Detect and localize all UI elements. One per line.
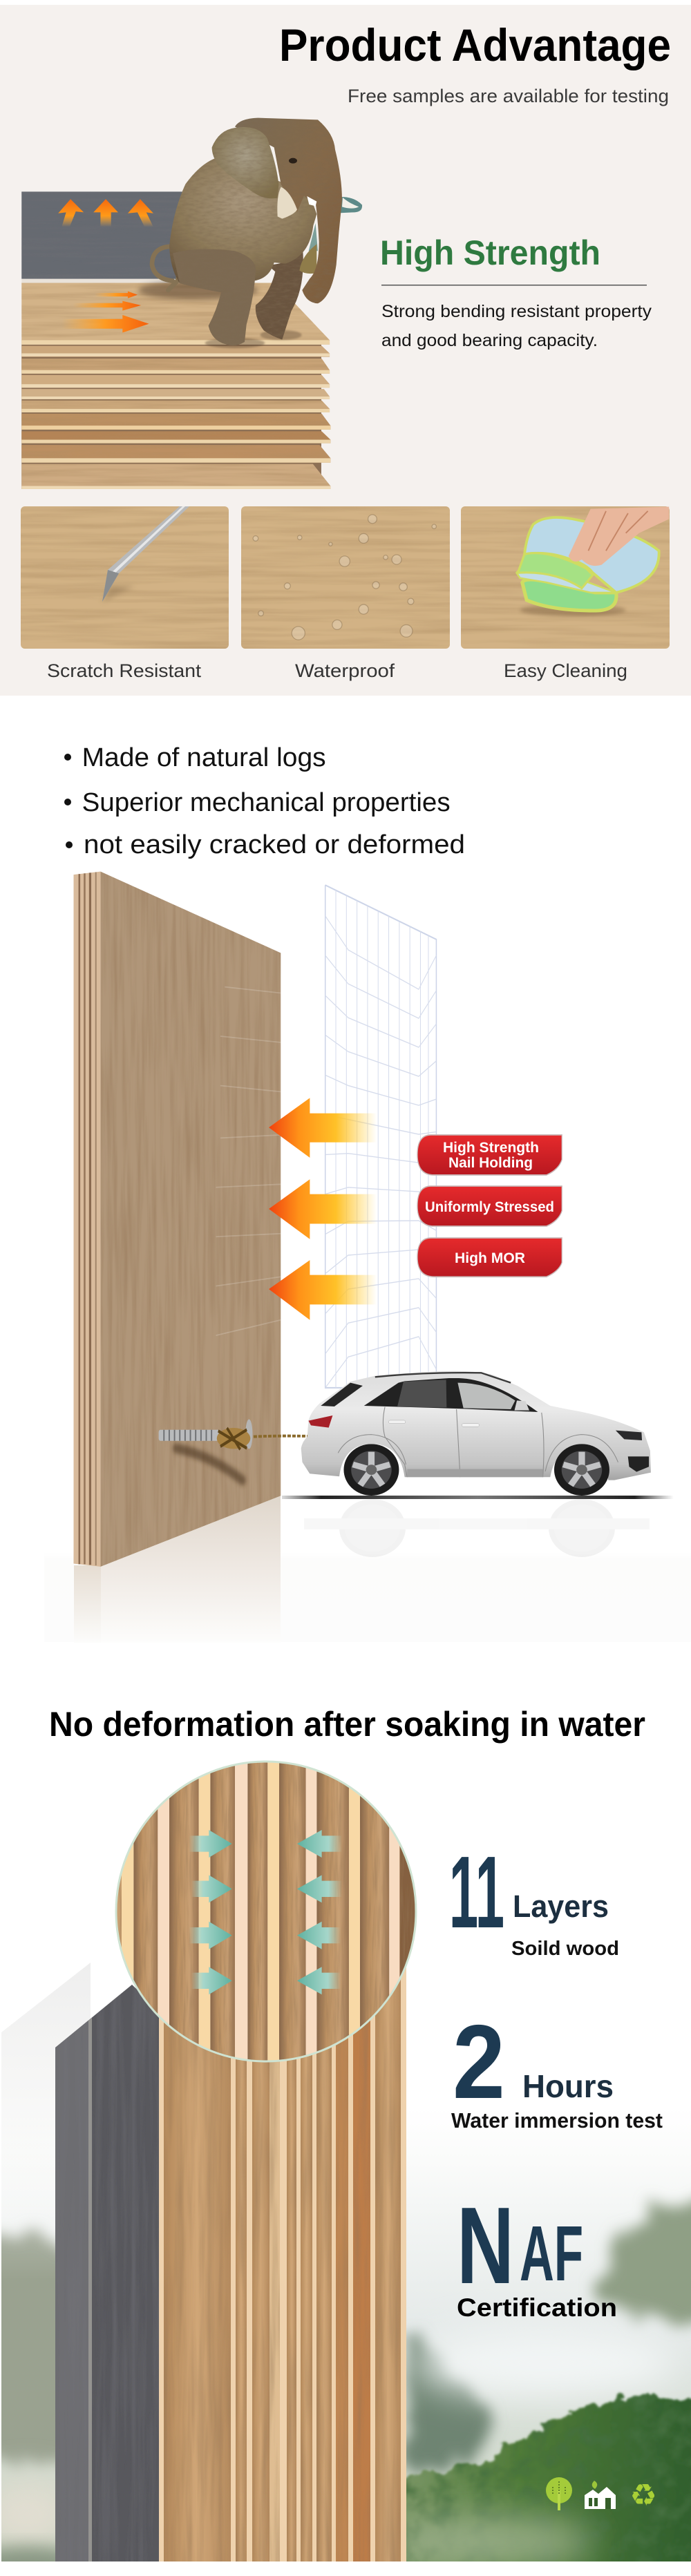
title: Product Advantage (279, 19, 671, 70)
bullet list (64, 743, 465, 859)
windows (321, 1378, 538, 1412)
description text: and good bearing capacity. (381, 331, 598, 350)
fluted wood panel (159, 1955, 406, 2561)
label: high mor (417, 1238, 562, 1277)
misty forest background (1, 2183, 691, 2561)
grey top board (21, 191, 193, 279)
front leg (256, 251, 303, 340)
stat: 2 hours: Hours (522, 2068, 614, 2104)
rear wheel (343, 1444, 399, 1496)
label: uniformly stressed (417, 1186, 562, 1226)
stat: 2 hours: 2 (453, 2003, 505, 2121)
stacked wood layers (21, 283, 330, 489)
door lines and handles (338, 1407, 618, 1477)
icon: towel and hand (517, 506, 669, 616)
screw shadow (176, 1448, 243, 1480)
label: high strength nail holding: High Strength (443, 1140, 539, 1156)
stat: 11 layers: Layers (513, 1889, 609, 1924)
board front face (100, 872, 281, 1567)
plywood edge layers (74, 872, 100, 1567)
label: high strength nail holding (417, 1135, 562, 1175)
stat: 2 hours (451, 2003, 663, 2133)
eye (289, 158, 297, 164)
floor fade background (44, 1552, 691, 1642)
stat: 11 layers (449, 1835, 619, 1960)
floor shadow under car (282, 1496, 674, 1499)
tail (152, 247, 180, 290)
water arrows pointing left (297, 1830, 342, 1994)
front foot on knee (299, 244, 316, 274)
front grille (628, 1456, 649, 1472)
faint mesh on board (216, 987, 281, 1335)
magnified wood slats (115, 1755, 417, 2063)
stat: naf certification (457, 2185, 617, 2322)
tusks (277, 187, 297, 219)
arrows: sideways force (61, 292, 149, 333)
panel: product advantage (0, 5, 691, 696)
panel: soaking test (0, 1705, 691, 2576)
icon: silver car (301, 1371, 651, 1496)
label: high strength nail holding: Nail Holding (448, 1155, 533, 1171)
description text (381, 302, 652, 350)
rear leg (173, 249, 256, 345)
car body (301, 1371, 651, 1480)
head and trunk (235, 118, 342, 303)
plank stack with force arrows (21, 191, 330, 489)
caption: Easy Cleaning (504, 660, 627, 681)
sill (407, 1469, 543, 1477)
icon: recycle: ♻ (630, 2478, 657, 2513)
teal tusk backing (339, 197, 362, 213)
description text: Strong bending resistant property (381, 302, 652, 321)
card: scratch resistant (21, 506, 229, 681)
board reflection (74, 1495, 281, 1643)
ear (212, 127, 278, 198)
label: high mor: High MOR (455, 1250, 525, 1266)
heading: high strength: High Strength (380, 233, 600, 272)
card: waterproof (241, 506, 450, 681)
arrows: upward force (58, 199, 153, 227)
shadow under elephant (138, 280, 258, 300)
stat: naf certification: AF (520, 2210, 583, 2297)
panel background (0, 5, 691, 696)
icon: tree (546, 2477, 572, 2510)
icon: water droplets (253, 515, 436, 640)
stat: 2 hours: Water immersion test (451, 2108, 663, 2133)
hand (569, 506, 669, 566)
bullet list: Made of natural logs (82, 743, 326, 772)
icon: elephant sitting on boards (138, 118, 362, 348)
stat: 11 layers: 11 (449, 1835, 504, 1949)
rope (249, 1436, 307, 1437)
heading: No deformation after soaking in water (49, 1705, 645, 1744)
tail light (308, 1415, 332, 1428)
water arrows pointing right (189, 1830, 232, 1994)
panel: mechanical properties (44, 743, 691, 1643)
stat: naf certification: N (457, 2185, 514, 2307)
wood board (74, 872, 281, 1567)
stat: 11 layers: Soild wood (511, 1938, 619, 1960)
front wheel (554, 1444, 609, 1496)
mesh grid (325, 885, 436, 1388)
dark wood panel (55, 1985, 159, 2561)
body (169, 158, 316, 283)
magnifier circle (115, 1755, 417, 2063)
icon: eco house (585, 2481, 616, 2509)
roof rail (375, 1373, 511, 1383)
divider under heading (381, 285, 647, 286)
car reflection (304, 1502, 650, 1554)
card: easy cleaning (461, 506, 670, 681)
label: uniformly stressed: Uniformly Stressed (425, 1199, 554, 1215)
stat: naf certification: Certification (457, 2293, 617, 2322)
caption: Waterproof (295, 660, 395, 681)
force arrows (269, 1098, 377, 1320)
bullet list: Superior mechanical properties (82, 788, 451, 817)
subtitle: Free samples are available for testing (348, 86, 669, 106)
caption: Scratch Resistant (47, 660, 202, 681)
screw and rope knot (159, 1420, 252, 1449)
bullet list: not easily cracked or deformed (84, 830, 465, 859)
glass panel (1, 1963, 91, 2280)
icon: steel needle (102, 506, 189, 602)
head light (616, 1431, 642, 1440)
